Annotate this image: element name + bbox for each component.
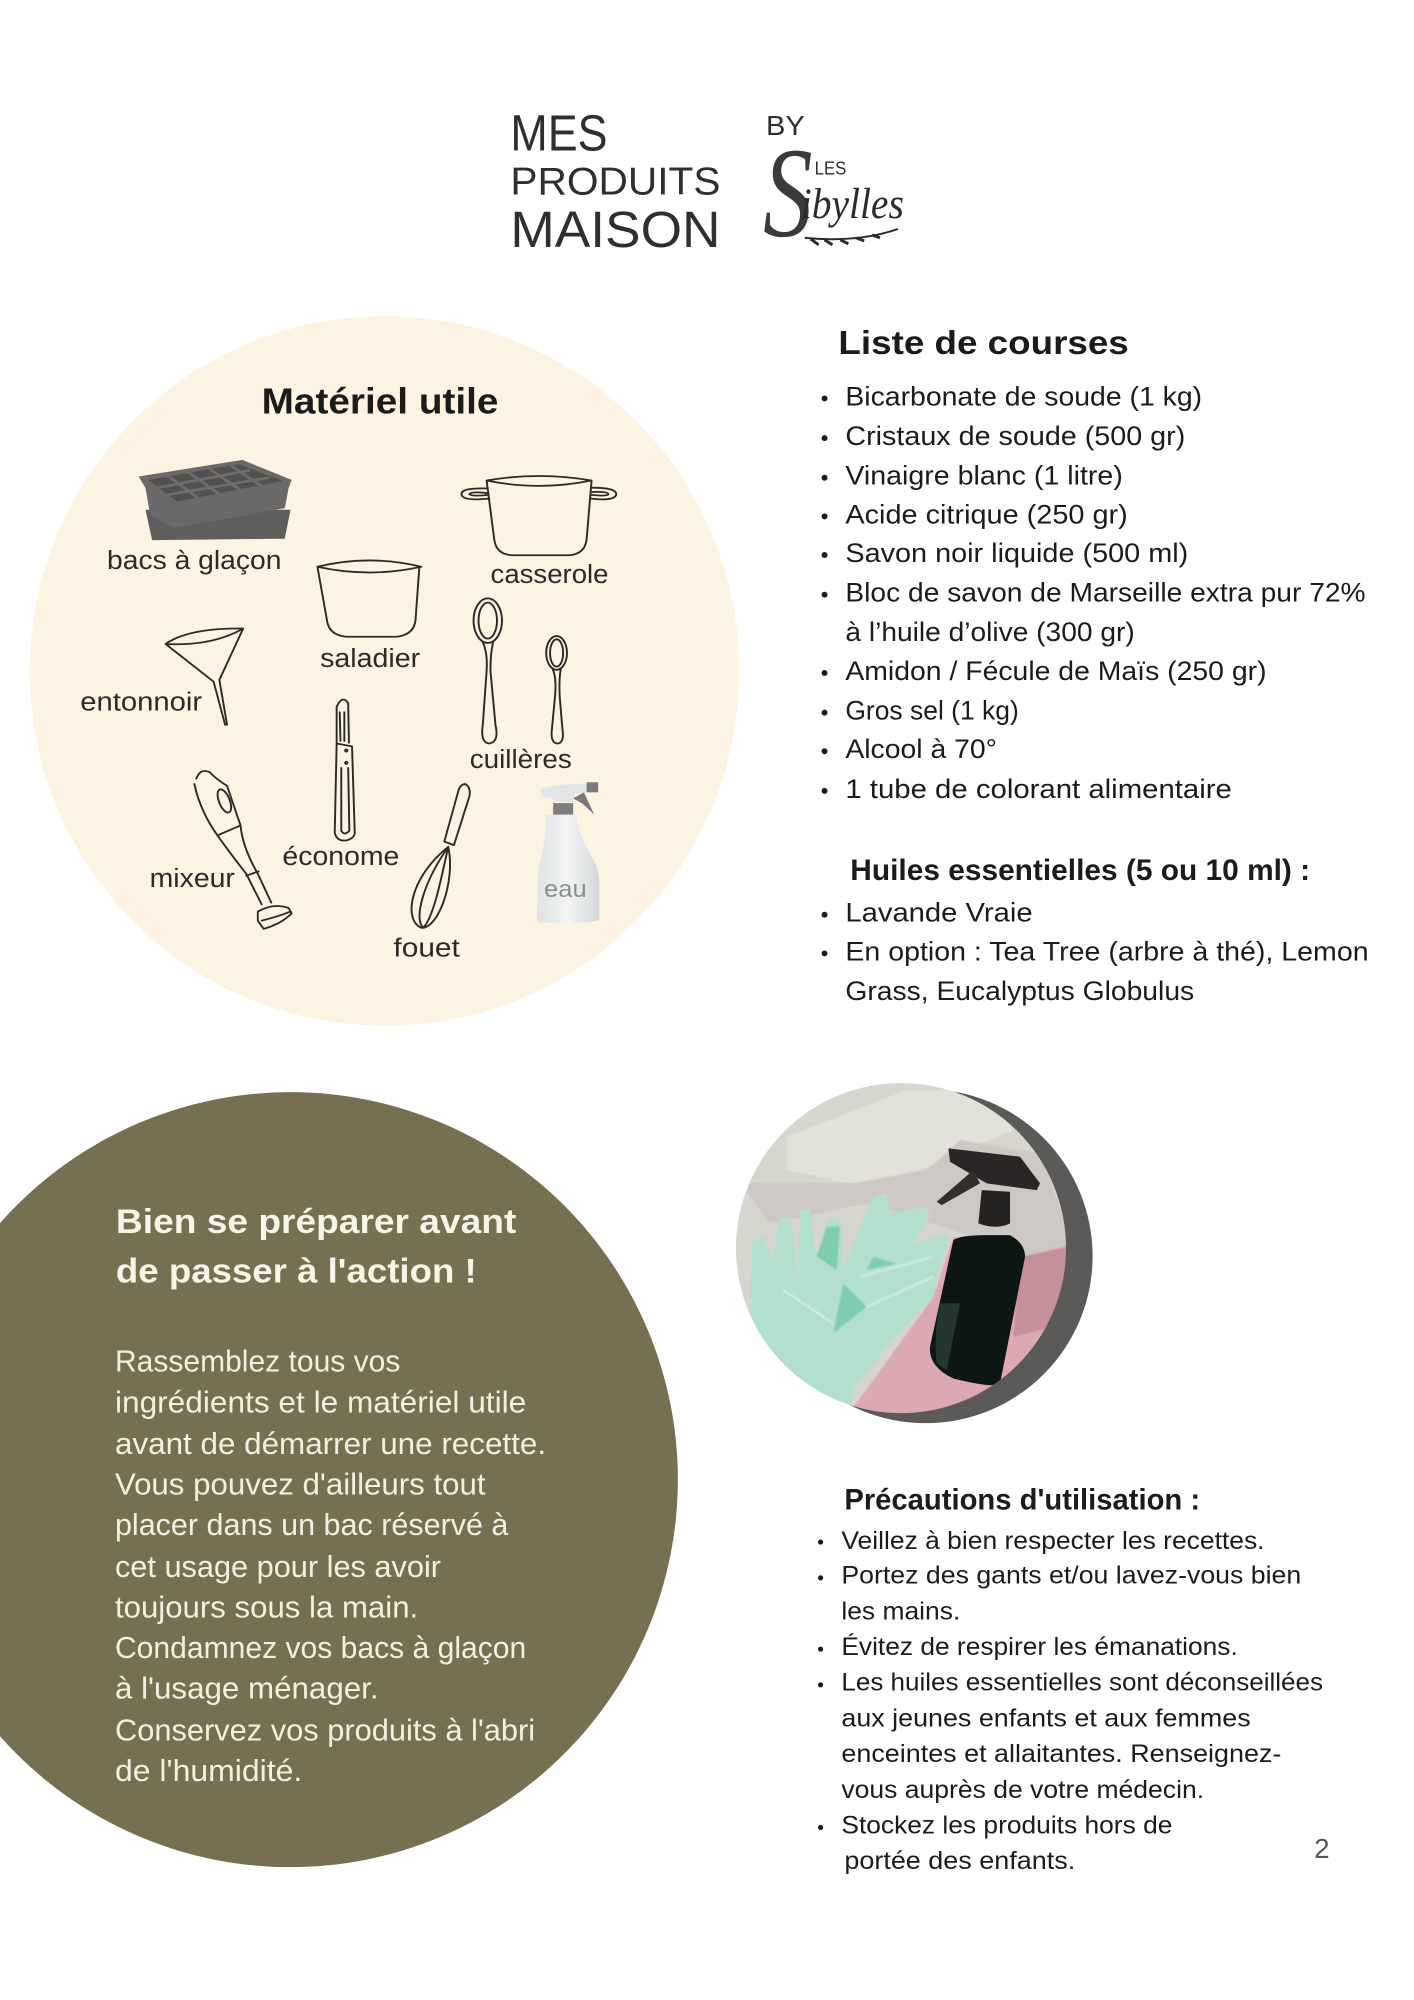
shopping list: 1 tube de colorant alimentaire: [845, 774, 1232, 804]
heading: bien se préparer: de passer à l'action !: [116, 1252, 477, 1290]
body text: Condamnez vos bacs à glaçon: [115, 1630, 526, 1665]
icon: spray bottle: [537, 782, 599, 923]
icon: économe: [335, 699, 355, 841]
label: eau: eau: [544, 876, 587, 903]
logo signature: LES: [815, 157, 846, 178]
precautions list: Les huiles essentielles sont déconseillées: [841, 1670, 1323, 1697]
photo: gloves and spray bottle: [736, 1083, 1093, 1424]
label: casserole: casserole: [491, 561, 608, 589]
logo byline: BY: [766, 110, 805, 141]
icon: fouet: [412, 784, 470, 928]
essential oils list: En option : Tea Tree (arbre à thé), Lemon: [845, 936, 1369, 966]
heading: huiles essentielles: Huiles essentielles (5 ou 10 ml) :: [850, 854, 1310, 887]
body text: Vous pouvez d'ailleurs tout: [115, 1467, 486, 1502]
logo wordmark: [510, 105, 720, 258]
shopping list: [822, 381, 1366, 804]
logo wordmark: PRODUITS: [510, 160, 720, 203]
page number: 2: [1314, 1833, 1330, 1864]
precautions list: Stockez les produits hors de: [841, 1812, 1172, 1839]
shopping list: Alcool à 70°: [845, 734, 997, 764]
icon: mixeur: [194, 771, 292, 929]
shopping list: Amidon / Fécule de Maïs (250 gr): [845, 656, 1267, 686]
icon: cuillères: [474, 598, 567, 743]
body text: avant de démarrer une recette.: [115, 1426, 546, 1461]
essential oils list: Grass, Eucalyptus Globulus: [845, 976, 1194, 1006]
shopping list: Gros sel (1 kg): [845, 696, 1019, 726]
label: bacs à glaçon: bacs à glaçon: [107, 547, 281, 575]
shopping list: Acide citrique (250 gr): [845, 499, 1128, 529]
heading: précautions: Précautions d'utilisation :: [844, 1483, 1200, 1516]
shopping list: Savon noir liquide (500 ml): [845, 538, 1188, 568]
label: saladier: saladier: [320, 645, 421, 673]
precautions list: Veillez à bien respecter les recettes.: [841, 1528, 1265, 1555]
label: entonnoir: entonnoir: [80, 689, 203, 717]
icon: saladier: [317, 560, 421, 637]
shopping list: Bloc de savon de Marseille extra pur 72%: [845, 578, 1366, 608]
precautions list: [818, 1528, 1323, 1875]
body text: Conservez vos produits à l'abri: [115, 1712, 535, 1747]
precautions list: enceintes et allaitantes. Renseignez-: [841, 1741, 1281, 1768]
equipment icons: [139, 460, 616, 929]
label: fouet: fouet: [393, 934, 460, 962]
panel: matériel utile: [30, 316, 739, 1026]
heading: matériel utile: Matériel utile: [262, 381, 498, 421]
logo wordmark: MAISON: [510, 201, 720, 258]
body text: [115, 1344, 546, 1788]
icon: entonnoir: [166, 628, 243, 725]
precautions list: vous auprès de votre médecin.: [841, 1777, 1204, 1804]
body text: à l'usage ménager.: [115, 1671, 379, 1706]
precautions list: Évitez de respirer les émanations.: [841, 1634, 1238, 1661]
shopping list: à l’huile d’olive (300 gr): [845, 617, 1135, 647]
shopping list: Cristaux de soude (500 gr): [845, 421, 1185, 451]
body text: cet usage pour les avoir: [115, 1549, 441, 1584]
panel: liste de courses: [822, 325, 1369, 1006]
body text: toujours sous la main.: [115, 1589, 418, 1624]
precautions list: portée des enfants.: [844, 1848, 1075, 1875]
heading: bien se préparer: Bien se préparer avant: [116, 1203, 517, 1241]
body text: ingrédients et le matériel utile: [115, 1384, 526, 1419]
precautions list: aux jeunes enfants et aux femmes: [841, 1705, 1251, 1732]
icon: ice cube trays: [139, 460, 292, 540]
precautions list: Portez des gants et/ou lavez-vous bien: [841, 1563, 1301, 1590]
precautions list: les mains.: [841, 1598, 960, 1625]
essential oils list: Lavande Vraie: [845, 898, 1033, 928]
panel: précautions d'utilisation: [818, 1483, 1323, 1875]
label: cuillères: cuillères: [470, 746, 572, 774]
label: économe: économe: [282, 843, 399, 871]
shopping list: Vinaigre blanc (1 litre): [845, 461, 1123, 491]
shopping list: Bicarbonate de soude (1 kg): [845, 381, 1202, 411]
body text: de l'humidité.: [115, 1753, 302, 1788]
essential oils list: [822, 898, 1369, 1006]
logo signature: [763, 121, 904, 264]
logo signature: ibylles: [801, 180, 904, 228]
panel: bien se préparer: [0, 1092, 678, 1867]
logo wordmark: MES: [510, 105, 608, 162]
logo: Mes produits maison by Les Sibylles: [510, 105, 904, 264]
label: mixeur: mixeur: [150, 865, 235, 893]
logo signature: S: [763, 121, 813, 264]
heading: bien se préparer: [116, 1203, 517, 1290]
heading: liste de courses: Liste de courses: [838, 325, 1129, 362]
body text: Rassemblez tous vos: [115, 1344, 400, 1379]
body text: placer dans un bac réservé à: [115, 1507, 509, 1542]
icon: casserole: [461, 476, 616, 555]
